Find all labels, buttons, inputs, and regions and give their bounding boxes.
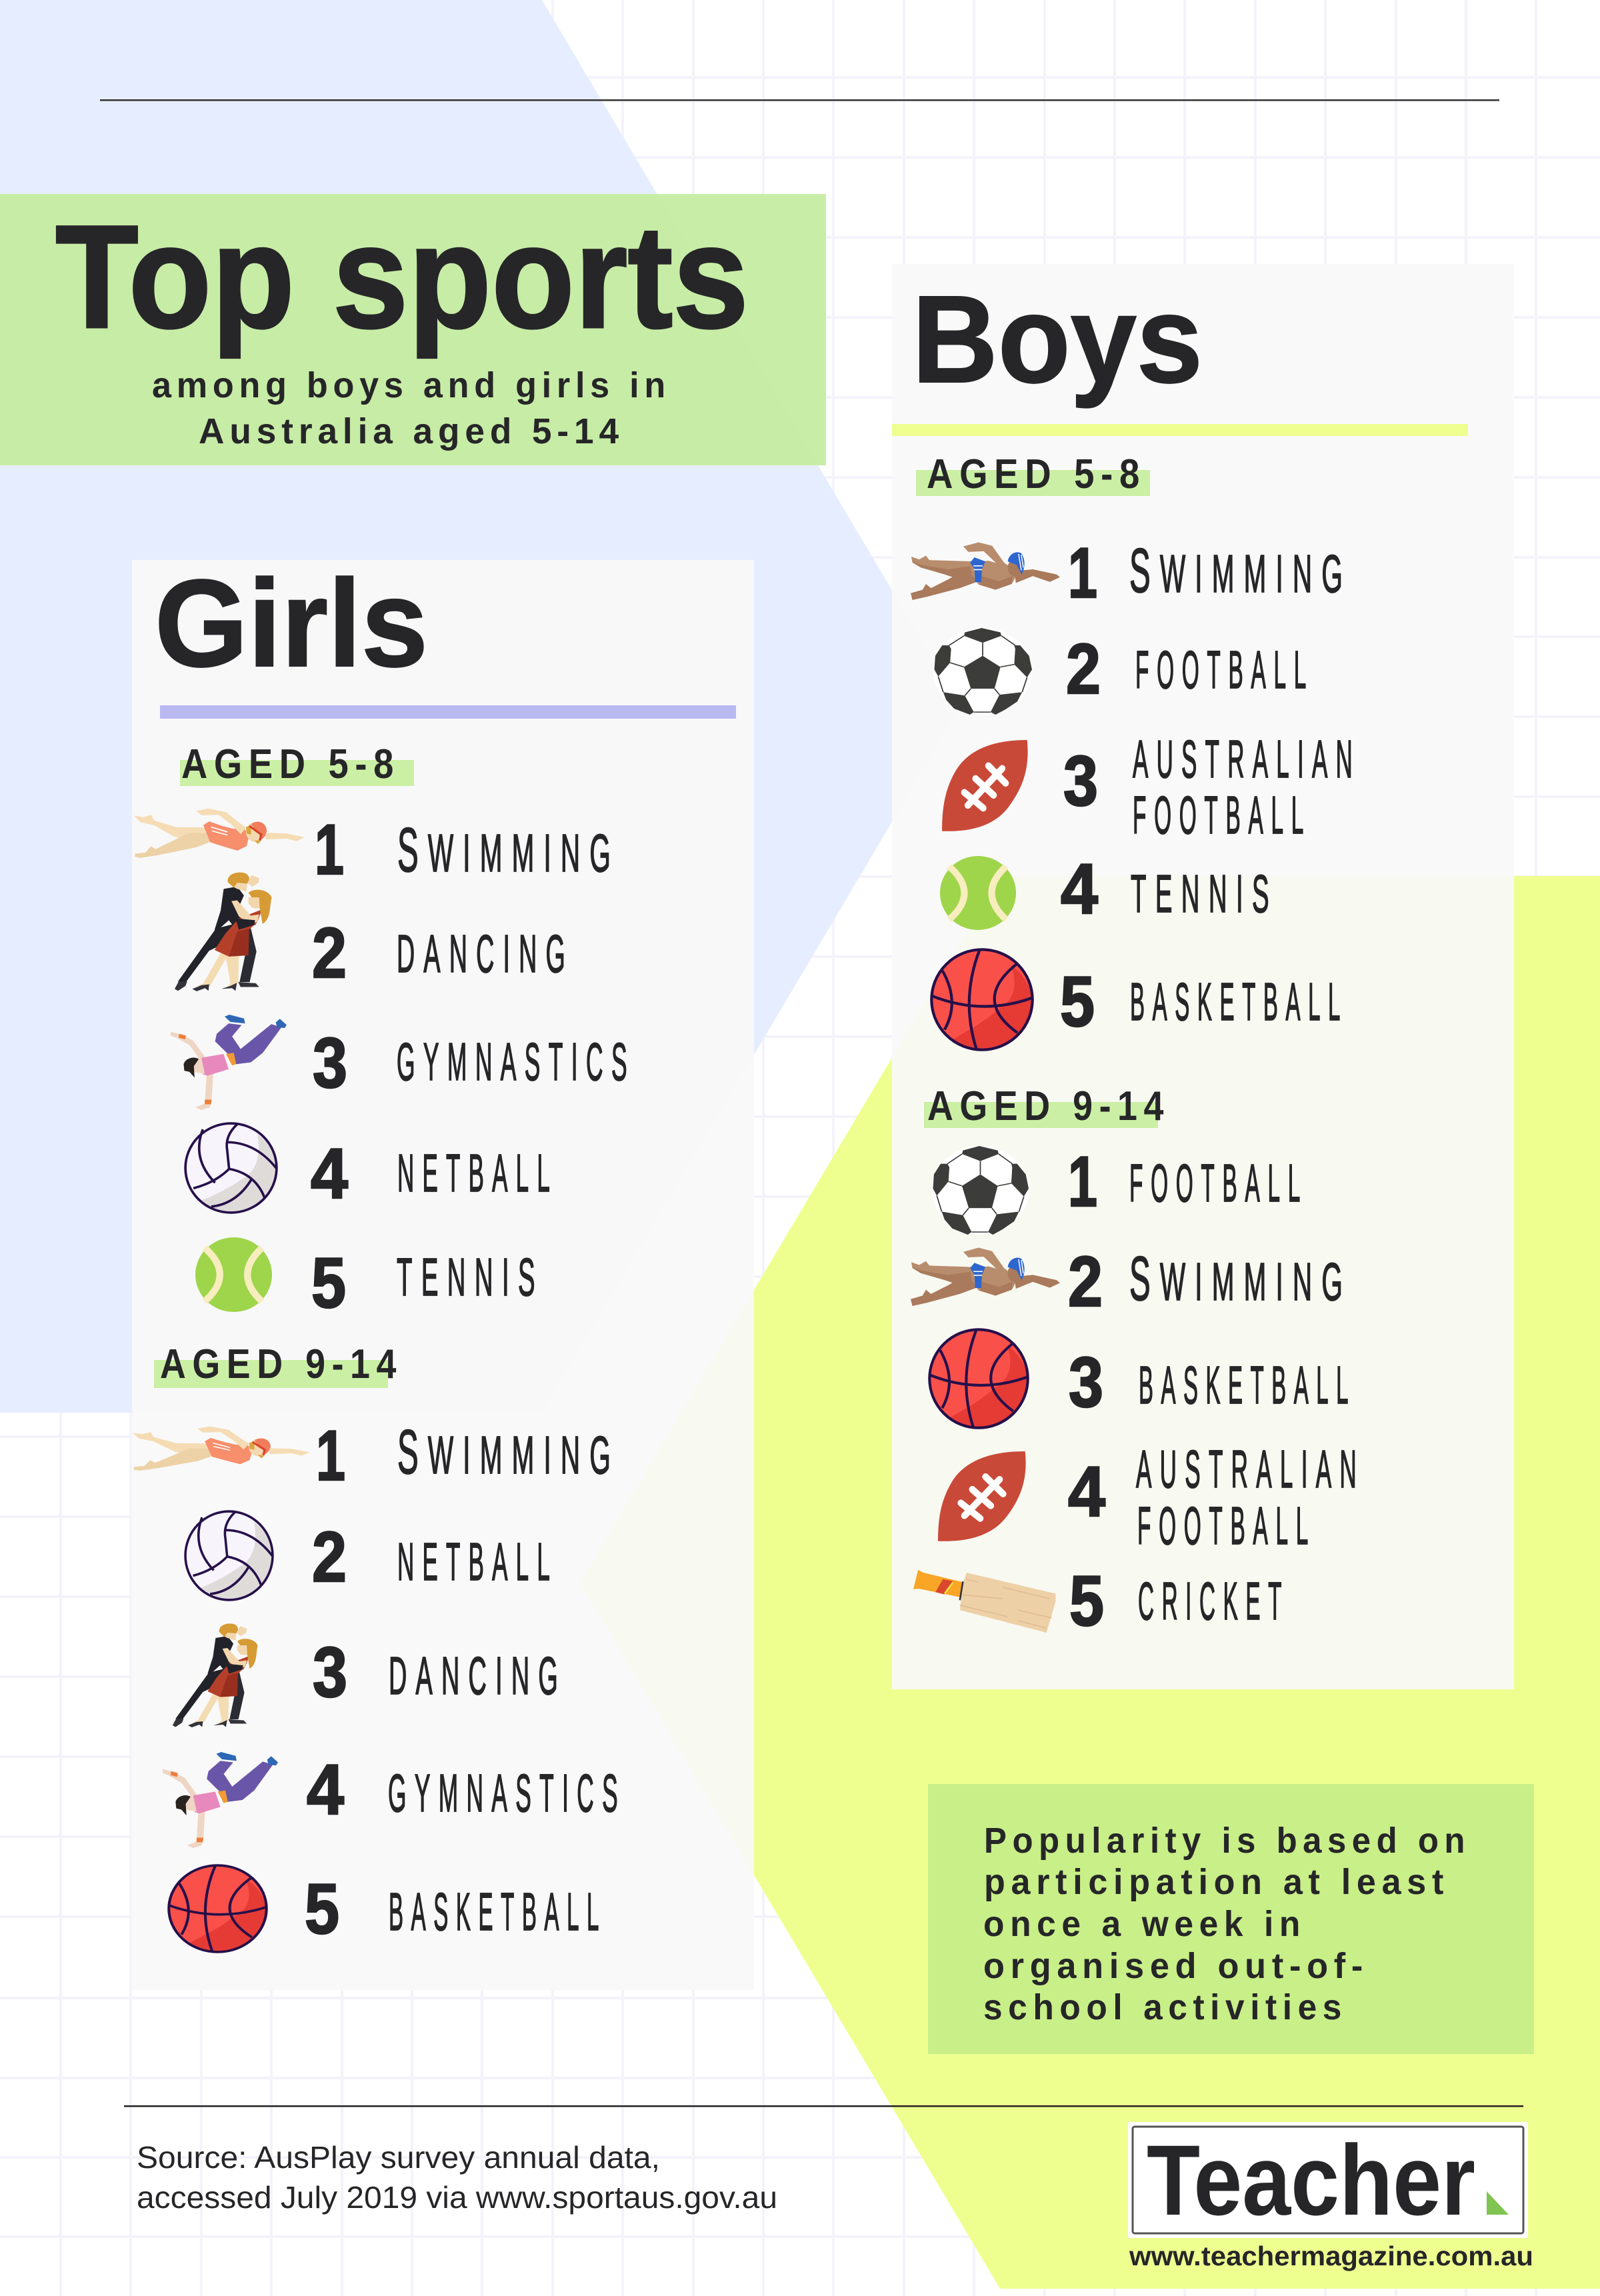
icon: soccer ball [933,628,1032,715]
callout: popularity note: organised out-of- [983,1946,1369,1986]
label: australian football: FOOTBALL [1137,1496,1316,1555]
row: boys 9-14 rank 2 swimming [911,1241,1352,1321]
panel: girls: BASKETBALL [389,1882,607,1941]
top rule [100,99,1499,101]
panel: girls: NETBALL [397,1143,558,1203]
label: swimming: SWIMMING [397,815,620,885]
rank 5: 5 [311,1243,346,1323]
row: girls 5-8 rank 5 tennis [195,1237,544,1323]
icon: basketball [931,949,1033,1050]
row: girls 9-14 rank 1 swimming [133,1415,620,1495]
icon: netball [185,1511,273,1600]
label: australian football [1133,729,1361,845]
rank 5: 5 [1060,961,1095,1041]
subtitle: among boys and girls in [152,365,671,405]
rank 5: 5 [305,1869,339,1949]
rank 4: 4 [307,1749,344,1829]
row: girls 9-14 rank 3 dancing [173,1623,567,1727]
section tag: girls aged 9-14: AGED 9-14 [160,1341,403,1387]
row: boys 9-14 rank 5 cricket [913,1561,1289,1641]
row: boys 5-8 rank 2 football [933,628,1314,715]
background shape: blue hexagon [0,0,961,1413]
heading underline [160,705,736,719]
row: girls 9-14 rank 5 basketball [169,1865,607,1953]
icon: basketball [929,1329,1028,1428]
rank 1: 1 [316,1415,345,1495]
icon: basketball [169,1865,267,1953]
subtitle [152,365,671,451]
icon: australian football [938,1451,1026,1541]
rank 2: 2 [1068,1241,1103,1321]
panel: girls: GYMNASTICS [388,1763,626,1823]
source text: accessed July 2019 via www.sportaus.gov.au [137,2180,777,2215]
label: australian football [1136,1439,1365,1555]
rank 2: 2 [312,1517,347,1597]
rank 4: 4 [311,1133,348,1213]
source text [137,2140,777,2215]
icon: australian football [942,740,1028,831]
heading underline [892,424,1468,436]
heading: girls: Girls [155,555,428,693]
icon: swimmer [133,1427,310,1471]
heading: boys: Boys [912,271,1203,409]
icon: swimmer [911,543,1060,600]
row: girls 5-8 rank 4 netball [185,1123,558,1213]
row: girls 5-8 rank 2 dancing [175,873,574,993]
title banner [0,194,826,465]
row: girls 9-14 rank 4 gymnastics [163,1749,626,1848]
rank 3: 3 [313,1632,347,1712]
section tag: girls aged 5-8: AGED 5-8 [181,741,400,787]
row: boys 5-8 rank 4 tennis [940,849,1278,930]
panel: boys: FOOTBALL [1129,1153,1308,1213]
panel: boys: TENNIS [1131,864,1278,923]
section tag: boys aged 5-8: AGED 5-8 [927,451,1146,497]
rank 1: 1 [315,809,344,889]
icon: gymnast [171,1015,287,1110]
subtitle: Australia aged 5-14 [199,411,624,451]
label: swimming: SWIMMING [397,1417,620,1487]
callout: popularity note: participation at least [984,1862,1449,1902]
row: boys 5-8 rank 5 basketball [931,949,1348,1050]
icon: swimmer [134,809,305,858]
icon: cricket bat [913,1570,1055,1633]
row: girls 9-14 rank 2 netball [185,1511,558,1600]
row: boys 9-14 rank 1 football [932,1141,1308,1235]
row: girls 5-8 rank 1 swimming [134,809,620,889]
website url: www.teachermagazine.com.au [1129,2241,1533,2271]
panel: boys: FOOTBALL [1135,640,1314,699]
callout: popularity note: school activities [983,1987,1347,2027]
row: boys 5-8 rank 3 australian football [942,729,1361,845]
panel: girls: DANCING [389,1646,567,1705]
rank 1: 1 [1068,1141,1097,1221]
row: boys 5-8 rank 1 swimming [911,533,1352,613]
rank 4: 4 [1061,849,1098,929]
callout: popularity note [928,1784,1534,2054]
label: australian football: FOOTBALL [1133,785,1311,845]
title: Top sports [55,195,749,359]
row: boys 9-14 rank 4 australian football [938,1439,1365,1555]
row: girls 5-8 rank 3 gymnastics [171,1015,635,1110]
row: boys 9-14 rank 3 basketball [929,1329,1356,1428]
source text: Source: AusPlay survey annual data, [137,2140,660,2175]
rank 3: 3 [1063,741,1098,821]
background shape: yellow hexagon [580,876,1600,2289]
callout: popularity note: once a week in [983,1904,1306,1944]
icon: tennis ball [940,856,1016,930]
label: swimming: SWIMMING [1129,535,1352,605]
section tag: boys aged 9-14: AGED 9-14 [927,1083,1170,1129]
panel: girls: DANCING [397,924,574,983]
icon: gymnast [163,1752,278,1848]
icon: dancers [173,1623,258,1727]
rank 2: 2 [1066,629,1101,709]
bottom rule [124,2105,1523,2107]
rank 2: 2 [312,913,347,993]
icon: dancers [175,873,271,991]
rank 3: 3 [1069,1342,1103,1422]
panel: girls [132,555,754,1990]
panel: boys: CRICKET [1138,1571,1289,1631]
logo: teacher: Teacher [1147,2124,1475,2236]
panel: girls: TENNIS [397,1247,544,1307]
panel: girls: GYMNASTICS [397,1032,635,1091]
rank 3: 3 [313,1023,347,1103]
rank 4: 4 [1068,1451,1105,1531]
panel: boys [892,264,1514,1689]
icon: swimmer [911,1248,1060,1306]
icon: tennis ball [195,1237,272,1312]
rank 5: 5 [1069,1561,1104,1641]
rank 1: 1 [1068,533,1097,613]
callout: popularity note: Popularity is based on [984,1821,1471,1861]
icon: netball [185,1123,277,1213]
panel: girls: NETBALL [397,1532,558,1591]
icon: soccer ball [932,1146,1029,1235]
label: swimming: SWIMMING [1129,1243,1352,1313]
